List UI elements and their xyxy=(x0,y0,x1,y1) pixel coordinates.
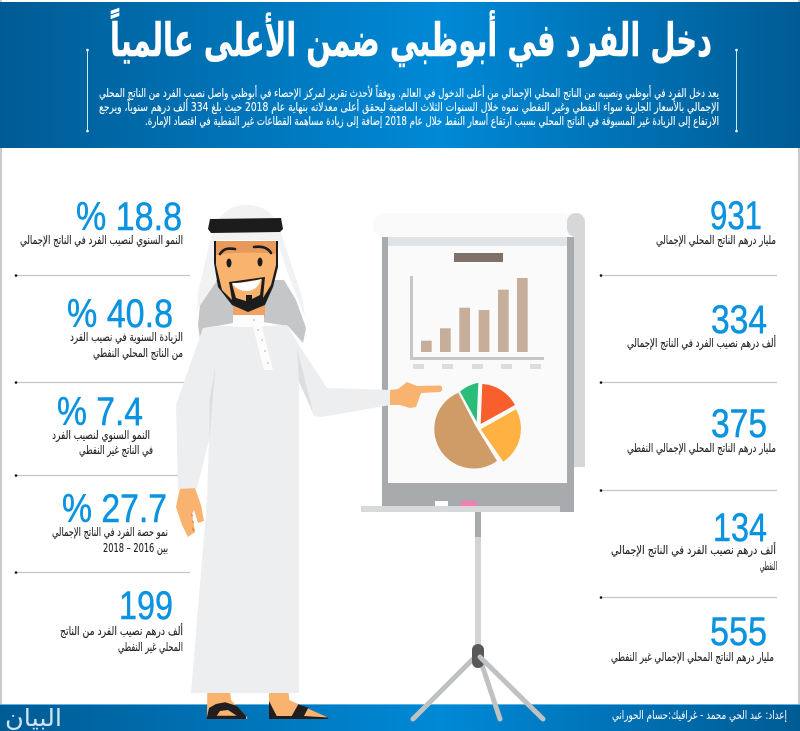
stat: 18.8 percent: % 18.8 xyxy=(76,195,182,239)
agal headband xyxy=(208,218,283,233)
stat: 40.8 percent: من الناتج المحلي النفطي xyxy=(93,346,183,361)
stat: 18.8 percent xyxy=(20,195,183,248)
stat: 7.4 percent: في الناتج غير النفطي xyxy=(79,443,153,458)
stat: 199: ألف درهم نصيب الفرد من الناتج xyxy=(60,623,183,639)
panel: footer xyxy=(0,704,800,731)
stat: 375: 375 xyxy=(711,402,767,446)
ghutra back xyxy=(198,280,306,343)
stat: 334 xyxy=(627,298,776,351)
text: النفطي xyxy=(760,559,777,573)
stat: 7.4 percent: النمو السنوي لنصيب الفرد xyxy=(52,428,150,443)
stat: 27.7 percent xyxy=(52,487,168,556)
stat: 40.8 percent: الزيادة السنوية في نصيب الفرد xyxy=(70,330,183,345)
thobe xyxy=(176,325,390,693)
pointing hand xyxy=(390,382,442,408)
ghutra xyxy=(197,205,305,318)
stat: 7.4 percent: % 7.4 xyxy=(57,390,143,434)
right foot and sandal xyxy=(269,690,328,719)
tripod stand xyxy=(413,512,543,719)
neck xyxy=(233,303,265,317)
stat: 931 xyxy=(656,194,776,248)
left hand xyxy=(176,488,204,537)
stat: 40.8 percent xyxy=(67,292,183,361)
stat: 555: 555 xyxy=(710,610,767,654)
stat: 199: المحلي غير النفطي xyxy=(118,640,183,655)
stat: 334: 334 xyxy=(711,298,767,342)
stat: 27.7 percent: بين 2016 – 2018 xyxy=(103,541,168,556)
stat: 27.7 percent: نمو حصة الفرد في الناتج الإجمالي xyxy=(52,525,168,540)
pie chart xyxy=(434,383,521,469)
collar and buttons xyxy=(233,315,273,370)
bar chart xyxy=(410,276,544,369)
stat: 18.8 percent: النمو السنوي لنصيب الفرد في الناتج الإجمالي xyxy=(20,233,183,248)
stat: 40.8 percent: % 40.8 xyxy=(67,292,173,336)
stat: 199 xyxy=(60,584,183,655)
stat: 931: 931 xyxy=(710,194,762,238)
illustration: man presenting xyxy=(176,205,442,719)
intro text xyxy=(99,84,719,129)
panel: header xyxy=(0,2,800,148)
stat: 199: 199 xyxy=(119,584,173,628)
stat: 134: 134 xyxy=(713,506,767,550)
stat: 27.7 percent: % 27.7 xyxy=(62,487,167,531)
stat: 375 xyxy=(627,402,776,456)
left foot and sandal xyxy=(207,690,247,719)
face xyxy=(214,241,278,312)
stat: 555 xyxy=(611,610,774,665)
stat: 7.4 percent xyxy=(52,390,153,458)
tray and markers xyxy=(361,501,560,512)
stat: 134 xyxy=(611,506,777,573)
illustration: flipchart xyxy=(361,213,585,719)
